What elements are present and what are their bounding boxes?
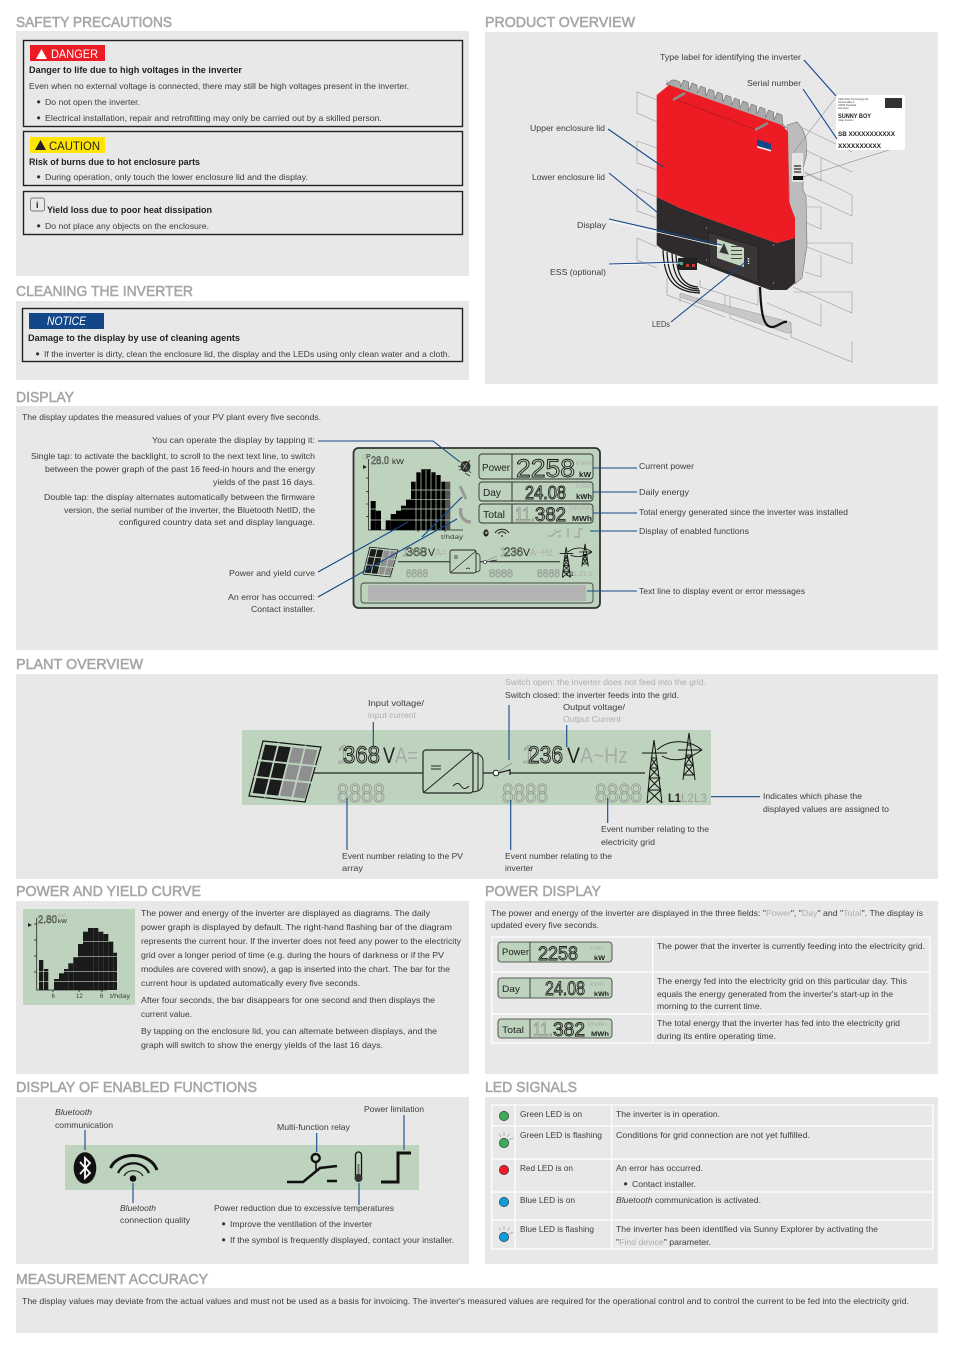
LED table grid: [492, 1105, 933, 1249]
plant callout labels: Switch closed: the inverter feeds into the grid.: [505, 690, 679, 700]
heading: display: DISPLAY: [16, 389, 74, 406]
yield description: graph will switch to show the energy yields of the last 16 days.: [141, 1040, 383, 1050]
power display table: [492, 937, 930, 1043]
field: total: 382: [535, 505, 566, 526]
icon: grid switch: [493, 763, 512, 776]
power flow line small: [398, 561, 560, 563]
function labels: communication: [55, 1120, 113, 1130]
callout labels: [530, 52, 801, 329]
plant callout labels: array: [342, 863, 364, 873]
LED table text: "Find device" parameter.: [616, 1237, 711, 1247]
plant callout labels: inverter: [505, 863, 533, 873]
LED table text: Green LED is on: [520, 1109, 582, 1119]
mini LCD: total: MWh: [591, 1032, 609, 1038]
voltage readings: V: [567, 743, 580, 768]
field: total: [479, 504, 593, 526]
mini LCD: day: kVAh: [590, 982, 605, 988]
caution box: •: [36, 170, 41, 184]
icon: wrench: [460, 486, 466, 499]
yield description: represents the current hour. If the inverter does not feed any power to the electricity: [141, 936, 462, 946]
heading: cleaning: CLEANING THE INVERTER: [16, 283, 193, 300]
field: total: MWh: [572, 516, 592, 523]
display instructions: yields of the past 16 days.: [213, 477, 315, 487]
display instructions: [31, 435, 316, 614]
heading: power display: POWER DISPLAY: [485, 883, 601, 900]
field: day: kWh: [576, 494, 592, 501]
caution box: Risk of burns due to hot enclosure parts: [29, 157, 200, 167]
panel: display: [16, 389, 938, 650]
power graph: kW: [392, 459, 404, 466]
wall bricks: [637, 80, 852, 362]
callout labels: Display: [577, 220, 607, 230]
LED: green flashing: [499, 1132, 513, 1148]
function labels: If the symbol is frequently displayed, contact your installer.: [230, 1235, 454, 1245]
yield description: modules are covered with snow), a gap is inserted into the chart. The bar for the: [141, 964, 450, 974]
input output readings: V: [428, 547, 436, 559]
power flow line: [313, 772, 645, 774]
power graph: E: [362, 455, 366, 461]
callout lines: [608, 60, 837, 322]
display instructions: Power and yield curve: [229, 568, 315, 578]
mounting rail: [680, 293, 792, 333]
LCD strip: [242, 730, 711, 808]
mini LCD: day: Day: [502, 984, 520, 995]
power display intro: [491, 908, 923, 930]
caution box: [24, 132, 462, 186]
plant callout labels: Event number relating to the: [601, 824, 709, 834]
display instructions: configured country data set and display language.: [119, 517, 315, 527]
power display intro: The power and energy of the inverter are displayed in the three fields: " Power", "Day" and "Total". The display is: [491, 908, 923, 918]
panel: power and yield curve: [16, 883, 469, 1074]
yield chart: kW: [58, 919, 68, 925]
display instructions: version, the serial number of the inverter, the Bluetooth NetID, the: [64, 505, 315, 515]
yield chart: t/hday: [110, 994, 130, 1000]
type label: Germany: [838, 106, 849, 110]
display callout labels: [639, 461, 848, 596]
yield chart: kWh: [58, 913, 67, 918]
LED table text: Bluetooth communication is activated.: [616, 1195, 761, 1205]
yield description: power graph is displayed by default. The right-hand flashing bar of the diagram: [141, 922, 452, 932]
plant callout labels: [342, 677, 889, 873]
display instructions: An error has occurred:: [228, 592, 315, 602]
LED: blue on: [499, 1197, 509, 1207]
screws: [706, 228, 774, 283]
LED table text: •: [624, 1177, 628, 1191]
type label: 34266 Niestetal: [838, 103, 856, 107]
heading: product overview: PRODUCT OVERVIEW: [485, 14, 636, 31]
field: power: kW: [579, 472, 591, 479]
lid handles: [673, 93, 768, 130]
icon: beetle tap: [458, 460, 471, 476]
field: total: Total: [483, 509, 505, 521]
type label: SB XXXXXXXXXXX: [838, 131, 896, 138]
power graph: 28.0: [371, 455, 389, 467]
input output readings: V: [523, 547, 531, 559]
field: day: Day: [483, 487, 502, 499]
display content: [720, 244, 742, 258]
LED table text: The inverter has been identified via Sunny Explorer by activating the: [616, 1224, 878, 1234]
power display descriptions: The total energy that the inverter has fed into the electricity grid: [657, 1018, 900, 1028]
heat sink fins: [666, 80, 786, 128]
inverter side bracket: [787, 122, 807, 284]
power graph: [362, 454, 463, 541]
lower enclosure lid: [657, 197, 795, 290]
panel: plant overview: [16, 656, 938, 879]
function labels: Power reduction due to excessive temperatures: [214, 1203, 394, 1213]
mini LCD: power: 2258: [538, 944, 578, 965]
plant callout labels: Output Current: [563, 714, 622, 724]
information box: Do not place any objects on the enclosure.: [45, 221, 209, 231]
type label: XXXXXXXXXX: [838, 143, 882, 150]
plant callout labels: input current: [368, 710, 417, 720]
mini LCD: total: [498, 1019, 612, 1041]
mini LCD: power: [498, 942, 612, 965]
plant callout labels: Input voltage/: [368, 698, 425, 708]
function callout lines: [85, 1115, 404, 1205]
function labels: •: [222, 1233, 226, 1247]
notice box: If the inverter is dirty, clean the enclosure lid, the display and the LEDs using only clean water and a cloth.: [44, 349, 450, 359]
phase labels: L1: [668, 791, 681, 805]
mini LCD: day: 24.08: [545, 979, 585, 1000]
yield chart: [23, 909, 135, 1005]
field: power: [479, 454, 593, 483]
callout labels: Lower enclosure lid: [532, 172, 605, 182]
type label: Sonnenallee 1: [838, 100, 855, 104]
LED table text: Green LED is flashing: [520, 1130, 602, 1140]
lid crease line: [677, 100, 757, 130]
LED table text: The inverter is in operation.: [616, 1109, 720, 1119]
leader lines to type label: [793, 97, 905, 177]
field: day: kVAh: [576, 484, 592, 490]
LED table text: Blue LED is flashing: [520, 1224, 594, 1234]
heading: plant overview: PLANT OVERVIEW: [16, 656, 144, 673]
icon: solar panel small: [363, 547, 398, 577]
voltage readings: 368: [343, 742, 380, 769]
event number digits: 8888: [595, 778, 642, 808]
icon: power towers: [642, 733, 702, 803]
voltage readings: 1: [522, 741, 536, 769]
display callout lines: [318, 441, 637, 597]
yield description: current hour is updated automatically every five seconds.: [141, 978, 360, 988]
notice box: Damage to the display by use of cleaning agents: [28, 333, 240, 343]
information box: Yield loss due to poor heat dissipation: [47, 205, 212, 215]
display bezel: [708, 232, 758, 283]
plant callout labels: Output voltage/: [563, 702, 626, 712]
input output readings: A=: [435, 547, 447, 559]
plant callout labels: Indicates which phase the: [763, 791, 862, 801]
field: total: 11.: [515, 505, 535, 526]
type label: SUNNY BOY: [838, 114, 871, 120]
callout labels: Upper enclosure lid: [530, 123, 605, 133]
input output readings: 1: [500, 545, 507, 559]
field: power: Power: [482, 462, 510, 474]
icon: inverter small: [450, 550, 480, 573]
caution box: During operation, only touch the lower enclosure lid and the display.: [45, 172, 308, 182]
danger box: DANGER: [51, 49, 98, 61]
danger box: Electrical installation, repair and retrofitting may only be carried out by a skilled person.: [45, 113, 382, 123]
AC cable: [760, 287, 787, 327]
panel: power display: [485, 883, 938, 1074]
display callout labels: Daily energy: [639, 487, 690, 497]
upper enclosure lid: [657, 85, 795, 243]
plant callout lines: [347, 705, 760, 850]
icon: signal quality: [110, 1155, 157, 1182]
ESS connector: [678, 258, 697, 270]
function labels: [55, 1104, 454, 1247]
function labels: connection quality: [120, 1215, 191, 1225]
information box: [24, 192, 462, 234]
display instructions: between the power graph of the past 16 feed-in hours and the energy: [45, 464, 316, 474]
mini LCD: day: [498, 978, 612, 1000]
input output readings: L1: [566, 572, 575, 578]
input output readings: 368: [406, 545, 427, 559]
function labels: Multi-function relay: [277, 1122, 351, 1132]
function labels: Bluetooth: [120, 1203, 156, 1213]
voltage readings: 236: [528, 742, 563, 769]
danger box: Danger to life due to high voltages in the inverter: [29, 65, 243, 75]
display callout labels: Display of enabled functions: [639, 526, 749, 536]
power display descriptions: during its entire operating time.: [657, 1031, 776, 1041]
LED table text: [520, 1109, 878, 1247]
yield chart: 6: [52, 994, 56, 1000]
icon: relay: [287, 1154, 337, 1182]
plant callout labels: electricity grid: [601, 837, 655, 847]
callout line highlights: [609, 221, 722, 265]
mini LCD: power: Power: [502, 947, 529, 958]
voltage readings: A~Hz: [580, 743, 628, 768]
yield chart: 12: [76, 994, 83, 1000]
LED: green on: [499, 1111, 509, 1121]
mini LCD: power: kVAr: [590, 946, 604, 952]
side label: [792, 153, 803, 182]
function labels: Bluetooth: [55, 1107, 92, 1117]
display instructions: You can operate the display by tapping it:: [152, 435, 315, 445]
voltage readings: 1: [337, 741, 351, 769]
cables: [663, 250, 700, 293]
LED: red on: [499, 1165, 509, 1175]
panel: LED signals: [485, 1079, 938, 1264]
display instructions: Double tap: the display alternates automatically between the firmware: [44, 492, 315, 502]
input output readings: [402, 545, 594, 580]
heading: measurement accuracy: MEASUREMENT ACCURACY: [16, 1271, 208, 1288]
callout labels: Serial number: [747, 78, 801, 88]
mini LCD: day: kWh: [594, 992, 609, 998]
heading: LED signals: LED SIGNALS: [485, 1079, 577, 1096]
panel: cleaning the inverter: [16, 283, 469, 380]
function labels: •: [222, 1217, 226, 1231]
power graph: t/hday: [441, 535, 463, 541]
danger box: •: [36, 111, 41, 125]
icons: enabled functions small: [483, 528, 583, 537]
SMA logo: [757, 139, 771, 152]
input output readings: A~Hz: [530, 547, 553, 559]
display callout labels: Text line to display event or error messages: [639, 586, 805, 596]
power display descriptions: morning to the current time.: [657, 1001, 762, 1011]
voltage readings: V: [383, 743, 395, 768]
LCD display: [354, 448, 600, 608]
input output readings: 8888: [406, 568, 428, 580]
panel: safety precautions: [16, 14, 469, 276]
input output readings: 8888: [537, 568, 560, 580]
field: day: [479, 482, 593, 503]
plant callout labels: displayed values are assigned to: [763, 804, 889, 814]
plant callout labels: Switch open: the inverter does not feed into the grid.: [505, 677, 706, 687]
yield description: current value.: [141, 1009, 192, 1019]
type label: Solar Inverter: [838, 118, 854, 122]
display instructions: Single tap: to activate the backlight, to scroll to the next text line, to switch: [31, 451, 315, 461]
function labels: Improve the ventilation of the inverter: [230, 1219, 372, 1229]
icon: thermometer: [354, 1152, 362, 1182]
icon: solar panel: [249, 741, 321, 802]
type label: [836, 95, 905, 150]
yield chart: 6: [100, 994, 104, 1000]
heading: power and yield curve: POWER AND YIELD CURVE: [16, 883, 201, 900]
input output readings: L2L3: [574, 572, 594, 578]
heading: safety precautions: SAFETY PRECAUTIONS: [16, 14, 172, 31]
danger box: Do not open the inverter.: [45, 97, 140, 107]
yield description: The power and energy of the inverter are displayed as diagrams. The daily: [141, 908, 431, 918]
voltage readings: A=: [395, 743, 418, 768]
caution box: CAUTION: [49, 141, 100, 153]
panel: display of enabled functions: [16, 1079, 469, 1264]
power display descriptions: [657, 941, 925, 1041]
text line area: [361, 583, 593, 603]
mini LCD: total: 382: [553, 1020, 585, 1041]
measurement text: The display values may deviate from the actual values and must not be used as a basis for invoicing. The inverter's measured values are required for the operational control and to control the current to be fed into the electricity grid.: [22, 1296, 909, 1306]
power display descriptions: The power that the inverter is currently feeding into the electricity grid.: [657, 941, 925, 951]
power display descriptions: equals the energy generated from the inverter's start-up in the: [657, 989, 893, 999]
notice box: •: [36, 347, 40, 361]
panel: product overview: [485, 14, 938, 384]
information box: •: [36, 219, 41, 233]
danger box: Even when no external voltage is connected, there may still be high voltages present in the inverter.: [29, 81, 409, 91]
LED table text: Conditions for grid connection are not yet fulfilled.: [616, 1130, 810, 1140]
panel: measurement accuracy: [16, 1271, 938, 1333]
yield description: grid over a longer period of time (e.g. during the hours of darkness or if the PV: [141, 950, 444, 960]
notice box: NOTICE: [47, 316, 86, 328]
event number digits: 8888: [502, 778, 548, 808]
field: power: 2258: [516, 455, 575, 483]
icon: phone: [461, 508, 471, 522]
power display intro: updated every five seconds.: [491, 920, 599, 930]
mini LCD: total: MVAh: [587, 1022, 607, 1028]
event number digits: 8888: [337, 778, 385, 808]
display intro text: The display updates the measured values of your PV plant every five seconds.: [22, 412, 321, 422]
voltage readings: [337, 741, 628, 769]
plant callout labels: Event number relating to the: [505, 851, 612, 861]
LED: blue flashing: [499, 1226, 513, 1242]
field: power: kVAr: [576, 461, 592, 467]
notice box: [22, 308, 462, 362]
field: total: MVAh: [569, 506, 592, 512]
power graph: P: [366, 454, 371, 461]
icon: power limit step: [381, 1153, 411, 1182]
input output readings: 1: [402, 545, 409, 559]
icon: inverter: [423, 750, 483, 793]
phase labels: L2L3: [681, 791, 707, 805]
function strip: [65, 1145, 419, 1190]
yield description: After four seconds, the bar disappears for one second and then displays the: [141, 995, 435, 1005]
mini LCD: total: 11.: [533, 1020, 553, 1041]
LED table text: An error has occurred.: [616, 1163, 703, 1173]
yield chart: 2.80: [38, 914, 57, 926]
display callout labels: Total energy generated since the inverter was installed: [639, 507, 848, 517]
mini LCD: power: kW: [594, 956, 605, 962]
yield description: By tapping on the enclosure lid, you can alternate between displays, and the: [141, 1026, 437, 1036]
danger box: [24, 40, 462, 126]
LED table text: Blue LED is on: [520, 1195, 575, 1205]
LED table text: Contact installer.: [632, 1179, 696, 1189]
callout labels: LEDs: [652, 319, 670, 329]
input output readings: 236: [504, 545, 523, 559]
field: day: 24.08: [525, 483, 566, 503]
LED table text: Red LED is on: [520, 1163, 573, 1173]
callout labels: ESS (optional): [550, 267, 606, 277]
icon: towers small: [560, 544, 592, 577]
input output readings: 8888: [489, 568, 513, 580]
information box: i: [36, 200, 39, 210]
phase labels: [668, 791, 707, 805]
display instructions: Contact installer.: [251, 604, 315, 614]
type label: SMA Solar Technology AG: [838, 97, 868, 101]
yield description: [141, 908, 462, 1050]
icon: bluetooth: [74, 1152, 96, 1184]
callout labels: Type label for identifying the inverter: [660, 52, 801, 62]
display callout labels: Current power: [639, 461, 694, 471]
danger box: •: [36, 95, 41, 109]
event number digits: [337, 778, 642, 808]
icon: switch small: [483, 556, 497, 564]
heading: enabled functions: DISPLAY OF ENABLED FUNCTIONS: [16, 1079, 257, 1096]
function labels: Power limitation: [364, 1104, 424, 1114]
LEDs on inverter: [748, 258, 750, 264]
mini LCD: total: Total: [502, 1025, 524, 1036]
display screen: [717, 239, 744, 267]
power display descriptions: The energy fed into the electricity grid on this particular day. This: [657, 976, 907, 986]
plant callout labels: Event number relating to the PV: [342, 851, 463, 861]
